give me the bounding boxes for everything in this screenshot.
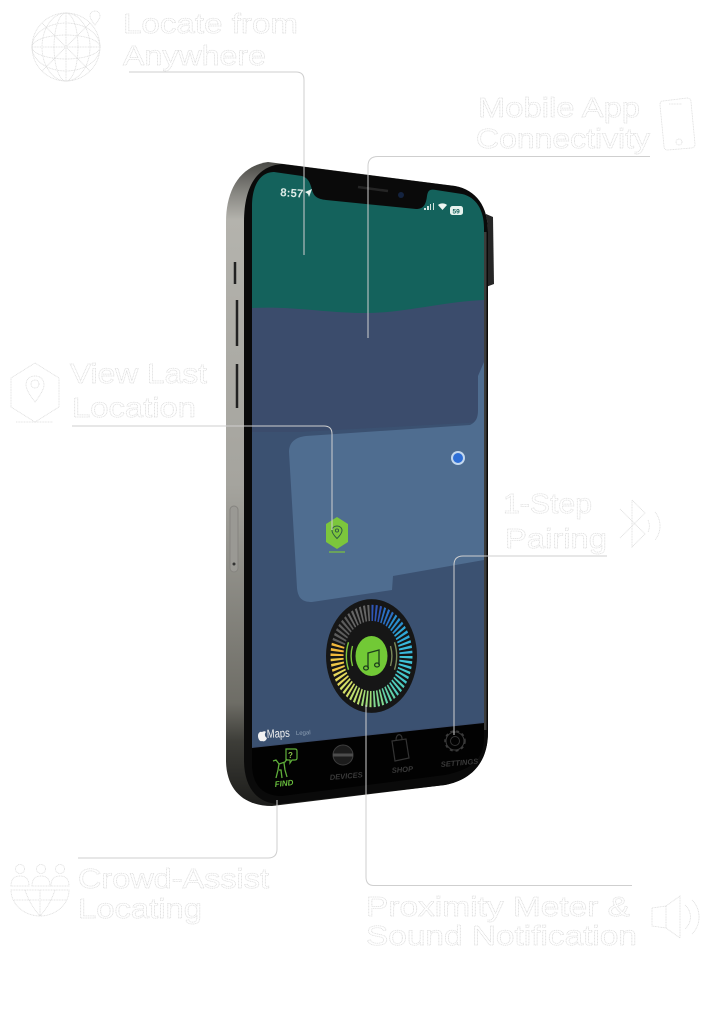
heading: Anywhere xyxy=(123,40,266,71)
tab: find: FIND xyxy=(274,778,294,789)
meter ticks xyxy=(323,596,420,716)
heading: Sound Notification xyxy=(366,920,637,951)
heading: Connectivity xyxy=(476,123,650,154)
tab: find xyxy=(273,749,297,789)
heading: Pairing xyxy=(505,523,607,554)
tab: devices: DEVICES xyxy=(329,770,363,782)
connector: view last location xyxy=(72,426,332,530)
feature: view last location xyxy=(11,358,207,423)
heading: Proximity Meter & xyxy=(366,891,630,922)
icon: speaker xyxy=(652,896,699,938)
phone body xyxy=(226,162,488,806)
connector: 1-step pairing xyxy=(454,556,607,735)
heading: Crowd-Assist xyxy=(78,863,269,894)
side details xyxy=(235,262,237,408)
green map pin marker xyxy=(326,517,348,552)
icon: crowd and globe xyxy=(11,864,69,916)
map: navy region xyxy=(252,300,484,750)
heading xyxy=(366,891,637,951)
proximity meter xyxy=(323,596,420,716)
heading xyxy=(78,863,269,924)
tab: settings xyxy=(440,731,479,769)
icon: phone xyxy=(660,98,695,150)
icon: bluetooth xyxy=(620,500,660,547)
status bar: 8:57 xyxy=(280,187,304,201)
connector: mobile app xyxy=(368,156,650,338)
screen xyxy=(252,172,484,796)
icon: globe with pin xyxy=(32,11,100,81)
tab: devices xyxy=(329,745,363,782)
phone xyxy=(226,162,494,806)
heading: Locating xyxy=(78,893,202,924)
feature: proximity meter and sound notification xyxy=(366,891,699,951)
connector: crowd assist xyxy=(78,800,277,858)
heading xyxy=(123,8,298,71)
map: lower blue region xyxy=(252,422,484,747)
feature: mobile app connectivity xyxy=(476,92,695,154)
map: light block xyxy=(289,362,484,602)
feature: 1-step pairing xyxy=(503,488,660,554)
heading: Location xyxy=(72,392,196,423)
side button right xyxy=(486,214,494,287)
heading xyxy=(503,488,607,554)
feature: locate from anywhere xyxy=(32,8,298,81)
tab: settings: SETTINGS xyxy=(440,757,479,769)
tab: shop: SHOP xyxy=(391,764,414,775)
connector: locate from anywhere xyxy=(129,72,304,255)
maps attribution: Legal xyxy=(296,730,311,737)
heading: Mobile App xyxy=(478,92,640,123)
maps attribution: Maps xyxy=(266,726,290,741)
front camera xyxy=(398,192,404,198)
tab: find: ? xyxy=(288,751,293,760)
status bar: 59 xyxy=(452,208,460,216)
heading xyxy=(70,358,207,423)
sound waves xyxy=(346,642,397,670)
map: teal region xyxy=(252,172,484,320)
heading: View Last xyxy=(70,358,207,389)
connector: proximity meter xyxy=(366,705,632,886)
tab: shop xyxy=(391,735,414,775)
speaker xyxy=(358,187,388,191)
feature: crowd-assist locating xyxy=(11,863,269,924)
user location dot xyxy=(451,451,465,465)
heading xyxy=(476,92,650,154)
icon: music note xyxy=(364,650,379,670)
heading: 1-Step xyxy=(503,488,592,519)
icon: hexagon pin xyxy=(11,363,59,422)
tab bar xyxy=(252,723,484,796)
heading: Locate from xyxy=(123,8,298,39)
status bar xyxy=(280,187,463,216)
maps attribution xyxy=(258,726,311,741)
